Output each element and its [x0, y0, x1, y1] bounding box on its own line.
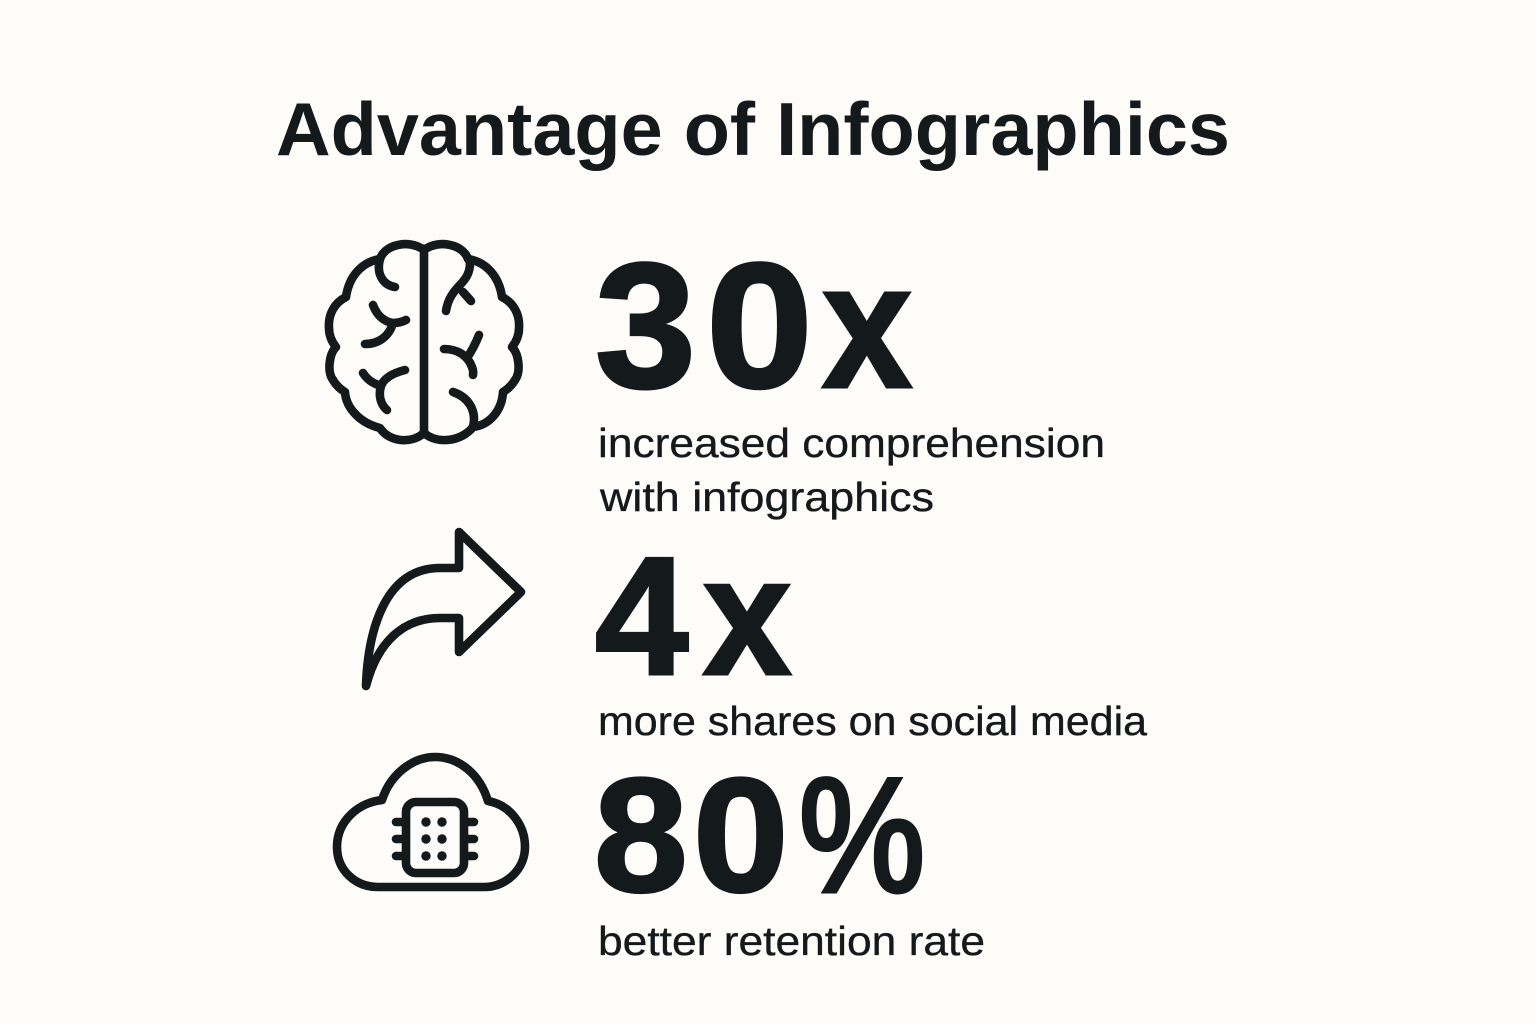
icon: share arrow [366, 532, 521, 686]
stat: 4x [595, 522, 791, 710]
stat: 80%: % [799, 745, 925, 926]
stat: 4x: x [703, 522, 791, 710]
stat: 80% [594, 745, 925, 926]
title: Advantage of Infographics [276, 87, 1230, 171]
icon: cloud with chip [337, 757, 525, 887]
icon: brain [329, 244, 519, 440]
label: increased comprehension [598, 420, 1105, 520]
label: increased comprehension: with infographics [599, 474, 934, 520]
stat: 80%: 0 [693, 745, 789, 926]
stat: 30x [595, 227, 912, 426]
label: more shares: more shares on social media [598, 698, 1147, 744]
label: increased comprehension: increased comprehension [598, 420, 1105, 466]
stat: 80%: 8 [594, 745, 688, 926]
stat: 30x: 3 [595, 227, 696, 426]
stat: 4x: 4 [595, 522, 688, 710]
label: better retention rate: better retention rate [598, 918, 985, 964]
stat: 30x: 0 [706, 227, 813, 425]
stat: 30x: x [822, 227, 912, 426]
